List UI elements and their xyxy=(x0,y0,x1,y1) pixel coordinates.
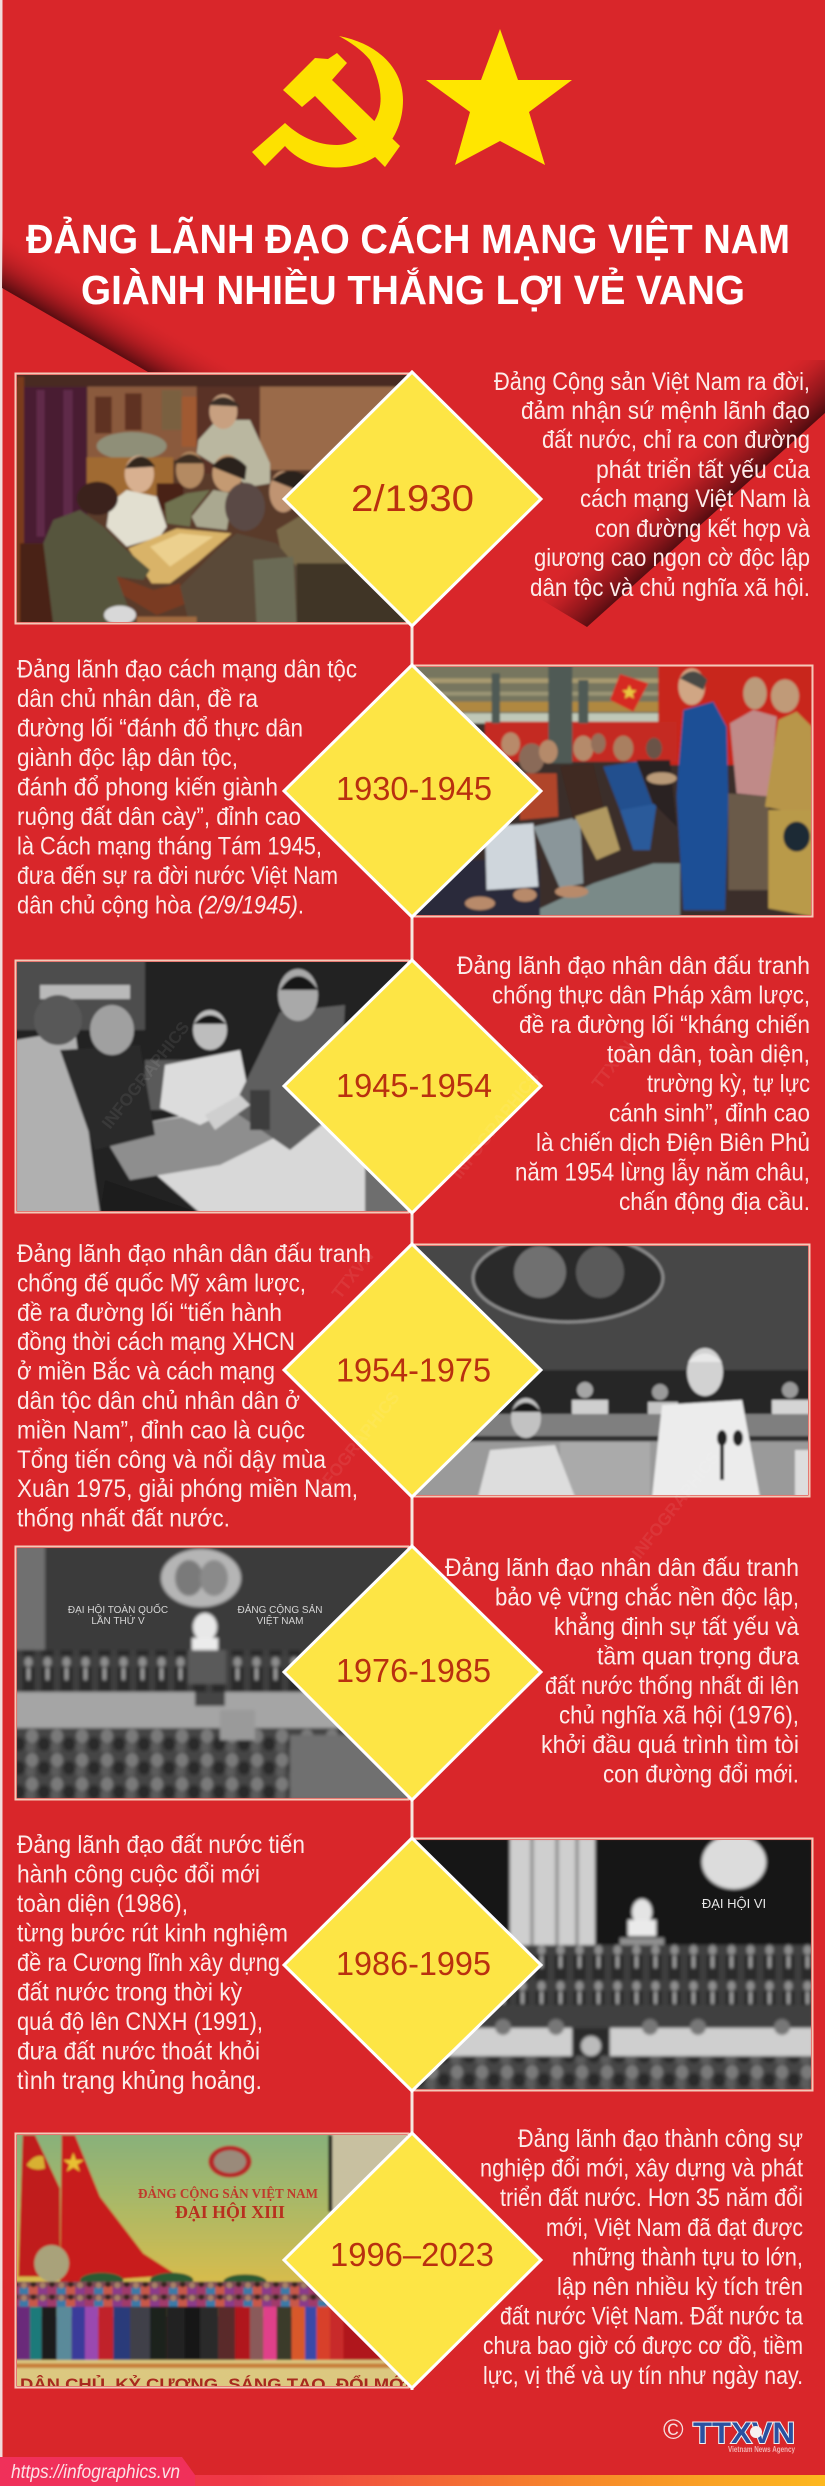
text block: 1930-1945: dân chủ cộng hòa (2/9/1945). xyxy=(17,892,304,920)
watermarks: INFOGRAPHICS xyxy=(308,1388,403,1502)
text block: 1954-1975: thống nhất đất nước. xyxy=(17,1505,230,1533)
text block: 1976-1985: khẳng định sự tất yếu và xyxy=(554,1611,799,1641)
date diamond: 1976-1985 xyxy=(284,1546,541,1800)
title: GIÀNH NHIỀU THẮNG LỢI VẺ VANG xyxy=(81,267,745,313)
date diamond: 1945-1954: 1945-1954 xyxy=(336,1067,492,1104)
text block: 1976-1985: con đường đổi mới. xyxy=(603,1760,799,1788)
photo frame 1 xyxy=(16,374,408,624)
photo frame 2 xyxy=(414,666,812,916)
left white edge xyxy=(0,0,2,2457)
credit logo: © TTXVN: Vietnam News Agency xyxy=(728,2445,795,2454)
text block: 1986-1995: đất nước trong thời kỳ xyxy=(17,1978,242,2006)
date diamond: 1930-1945: 1930-1945 xyxy=(336,770,492,807)
text block: 1976-1985: chủ nghĩa xã hội (1976), xyxy=(559,1702,799,1730)
date diamond: 1986-1995 xyxy=(284,1838,541,2091)
photo: 1996-2023 congress: ĐẠI HỘI XIII xyxy=(175,2201,285,2222)
text block: 1930-1945: Đảng lãnh đạo cách mạng dân tộc xyxy=(17,656,357,684)
text block: 1986-1995 xyxy=(17,1831,305,2095)
photo: 1976-1985 black and white: ĐẠI HỘI TOÀN QUỐC xyxy=(68,1602,168,1616)
watermarks xyxy=(98,1018,723,1562)
date diamond: 1996–2023 xyxy=(284,2133,541,2388)
text block: 1930-1945: đường lối “đánh đổ thực dân xyxy=(17,714,303,742)
text block: 1986-1995: quá độ lên CNXH (1991), xyxy=(17,2008,263,2036)
date diamond: 1954-1975 xyxy=(284,1244,541,1497)
text block: 1930-1945: đưa đến sự ra đời nước Việt Nam xyxy=(17,862,338,890)
text block: 1976-1985: tầm quan trọng đưa xyxy=(597,1642,799,1670)
text block: 1954-1975 xyxy=(17,1240,371,1533)
text block: 1930-1945: đánh đổ phong kiến giành xyxy=(17,774,278,802)
text block: 2/1930 xyxy=(494,368,810,602)
date diamond: 1986-1995: 1986-1995 xyxy=(336,1945,491,1982)
emblem: hammer and sickle xyxy=(252,36,403,167)
text block: 1945-1954 xyxy=(457,952,810,1216)
text block: 1930-1945 xyxy=(17,656,357,920)
text block: 1954-1975: đồng thời cách mạng XHCN xyxy=(17,1328,295,1356)
date diamond: 1954-1975: 1954-1975 xyxy=(336,1352,491,1388)
text block: 1986-1995: đưa đất nước thoát khỏi xyxy=(17,2038,260,2066)
text block: 1954-1975: đề ra đường lối “tiến hành xyxy=(17,1299,282,1327)
photo: 1986-1995 black and white xyxy=(413,1835,813,2091)
text block: 1986-1995: hành công cuộc đổi mới xyxy=(17,1860,260,1888)
photo: 1930-1945 painting xyxy=(410,660,820,920)
text block: 1954-1975: miền Nam”, đỉnh cao là cuộc xyxy=(17,1416,305,1444)
text block: 1954-1975: chống đế quốc Mỹ xâm lược, xyxy=(17,1269,306,1297)
title xyxy=(26,216,790,313)
text block: 1986-1995: đề ra Cương lĩnh xây dựng xyxy=(17,1949,280,1977)
text block: 1986-1995: từng bước rút kinh nghiệm xyxy=(17,1920,288,1948)
text block: 1986-1995: toàn diện (1986), xyxy=(17,1890,188,1918)
photo frame 6 xyxy=(414,1838,812,2090)
text block: 1954-1975: dân tộc dân chủ nhân dân ở xyxy=(17,1387,300,1415)
text block: 1976-1985: Đảng lãnh đạo nhân dân đấu tranh xyxy=(445,1554,799,1582)
photo frame 7 xyxy=(16,2134,408,2388)
watermarks: TTXVN xyxy=(328,1247,377,1302)
text block: 1954-1975: ở miền Bắc và cách mạng xyxy=(17,1357,275,1386)
text block: 2/1930: phát triển tất yếu của xyxy=(596,456,810,484)
text block: 1986-1995: tình trạng khủng hoảng. xyxy=(17,2067,262,2095)
text block: 1930-1945: giành độc lập dân tộc, xyxy=(17,744,238,772)
text block: 1930-1945: là Cách mạng tháng Tám 1945, xyxy=(17,832,322,860)
text block: 1945-1954: toàn dân, toàn diện, xyxy=(607,1040,810,1068)
ribbon fold: upper left shadow xyxy=(2,230,300,372)
photo: 1976-1985 black and white xyxy=(15,1546,410,1800)
photo: 1945-1954 black and white xyxy=(15,960,409,1213)
text block: 1954-1975: Xuân 1975, giải phóng miền Nam, xyxy=(17,1475,358,1503)
photo: 1976-1985 black and white: ĐẢNG CỘNG SẢN xyxy=(237,1603,323,1616)
title: ĐẢNG LÃNH ĐẠO CÁCH MẠNG VIỆT NAM xyxy=(26,216,790,262)
photo: 1996-2023 congress: DÂN CHỦ, KỶ CƯƠNG, SÁNG TẠO, ĐỔI MỚI xyxy=(20,2375,410,2394)
date diamond: 2/1930 xyxy=(284,372,541,626)
text block: 1930-1945: ruộng đất dân cày”, đỉnh cao xyxy=(17,803,301,831)
photo: 1996-2023 congress: ĐẢNG CỘNG SẢN VIỆT NAM xyxy=(138,2185,318,2202)
photo frame 3 xyxy=(16,960,408,1212)
watermarks: INFOGRAPHICS xyxy=(448,1068,543,1182)
watermarks: INFOGRAPHICS xyxy=(628,1448,723,1562)
credit logo: © TTXVN xyxy=(663,2414,795,2454)
credit logo: © TTXVN: © xyxy=(663,2414,684,2445)
text block: 1976-1985 xyxy=(445,1554,799,1788)
text block: 1986-1995: Đảng lãnh đạo đất nước tiến xyxy=(17,1831,305,1859)
credit logo: © TTXVN: TTXVN xyxy=(693,2417,795,2450)
photo frame 5 xyxy=(16,1546,408,1800)
text block: 1996–2023 xyxy=(480,2125,803,2390)
photo frame 4 xyxy=(414,1244,810,1496)
date diamond: 1976-1985: 1976-1985 xyxy=(336,1652,491,1689)
date diamond: 1996–2023: 1996–2023 xyxy=(330,2236,494,2273)
text block: 1930-1945: dân chủ nhân dân, đề ra xyxy=(17,685,258,713)
text block: 1954-1975: Đảng lãnh đạo nhân dân đấu tranh xyxy=(17,1240,371,1268)
watermarks: TTXVN xyxy=(588,1037,637,1092)
ribbon fold: right shadow xyxy=(480,360,825,627)
watermarks: INFOGRAPHICS xyxy=(98,1018,193,1132)
text block: 1954-1975: Tổng tiến công và nổi dậy mùa xyxy=(17,1446,326,1474)
date diamond: 1930-1945 xyxy=(284,665,541,917)
photo: 1996-2023 congress xyxy=(10,2130,417,2394)
date diamond: 2/1930: 2/1930 xyxy=(351,478,474,519)
date diamond: 1945-1954 xyxy=(284,960,541,1213)
url tab: https://infographics.vn xyxy=(11,2462,180,2483)
url tab xyxy=(0,2457,195,2486)
emblem: yellow star xyxy=(426,29,572,165)
photo: 1976-1985 black and white: LẦN THỨ V xyxy=(91,1614,145,1627)
photo: 1930 painting xyxy=(10,370,413,630)
text block: 1976-1985: khởi đầu quá trình tìm tòi xyxy=(541,1731,799,1759)
timeline vertical line xyxy=(410,620,414,2390)
photo: 1954-1975 black and white xyxy=(413,1234,810,1497)
photo: 1976-1985 black and white: VIỆT NAM xyxy=(256,1614,304,1627)
bottom gradient strip xyxy=(0,2475,825,2486)
photo: 1986-1995 black and white: ĐẠI HỘI VI xyxy=(702,1896,766,1911)
text block: 1945-1954: chấn động địa cầu. xyxy=(619,1188,810,1216)
